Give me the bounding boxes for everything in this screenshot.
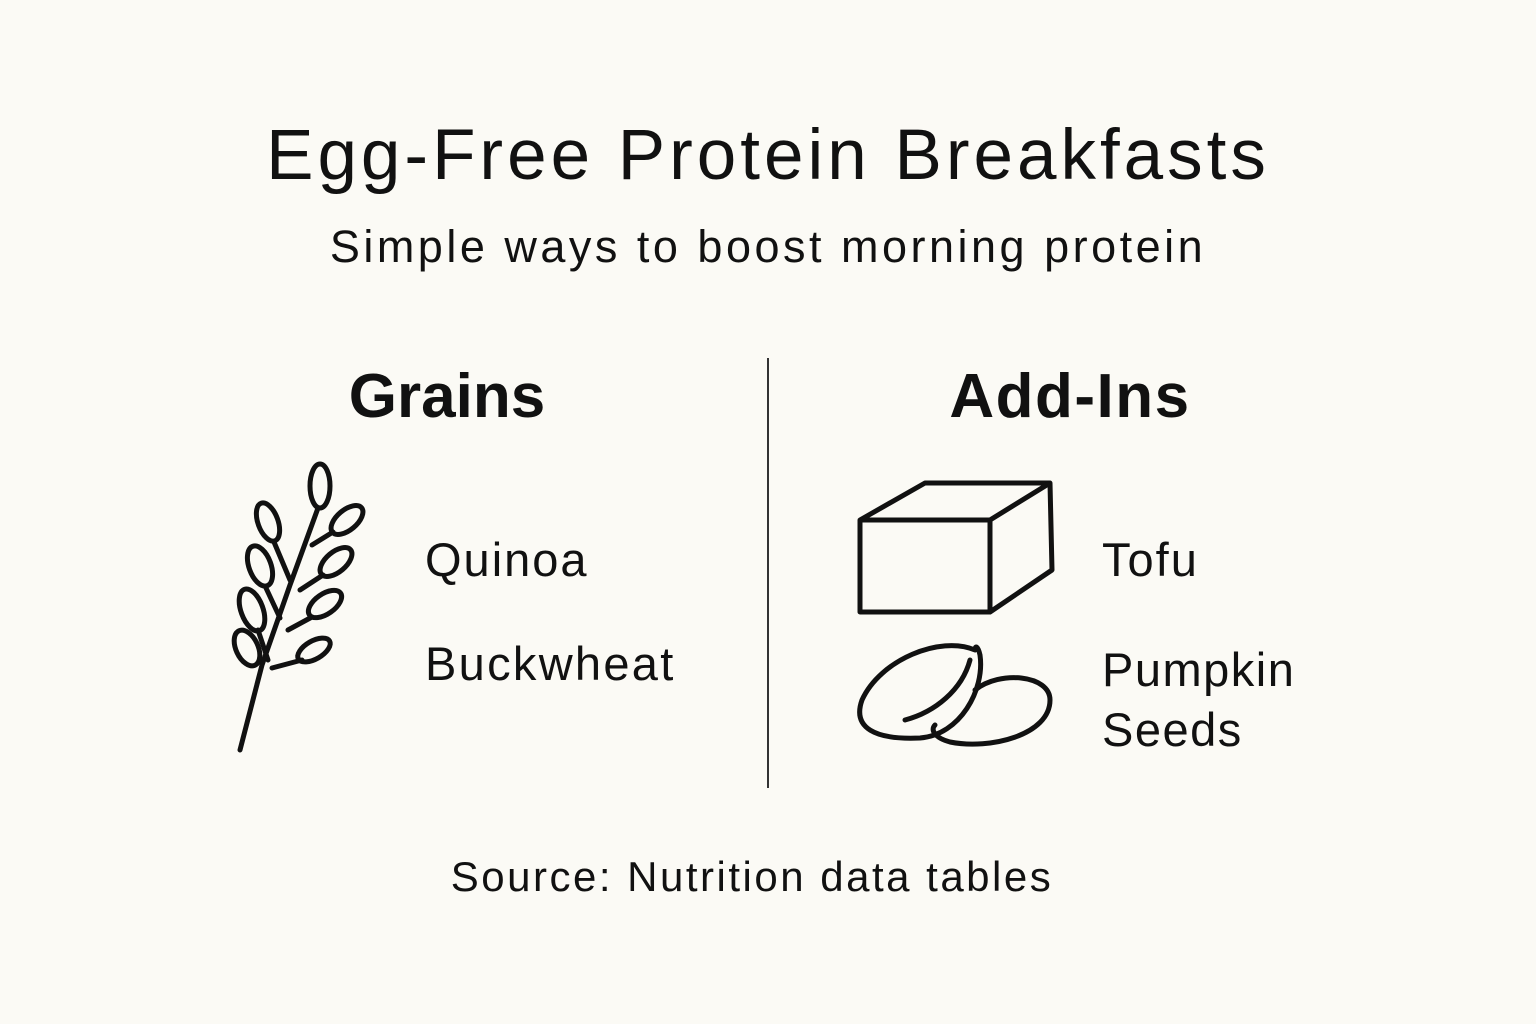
icon: wheat [232, 462, 366, 752]
icon: pumpkin seeds [857, 643, 1052, 747]
text: Buckwheat: Buckwheat [425, 637, 676, 690]
text: Tofu: Tofu [1102, 533, 1199, 586]
heading: Grains: Grains [349, 362, 545, 431]
subtitle: Simple ways to boost morning protein [330, 221, 1206, 272]
text: Pumpkin Seeds: Seeds [1102, 703, 1243, 756]
title: Egg-Free Protein Breakfasts [266, 116, 1270, 195]
heading: Add-Ins: Add-Ins [949, 362, 1191, 431]
text: Quinoa: Quinoa [425, 533, 589, 586]
icon: tofu [858, 480, 1054, 614]
divider [767, 358, 769, 788]
source: Source: Nutrition data tables [451, 853, 1053, 900]
text: Pumpkin Seeds: Pumpkin [1102, 643, 1295, 696]
text: Pumpkin Seeds [1102, 643, 1295, 756]
